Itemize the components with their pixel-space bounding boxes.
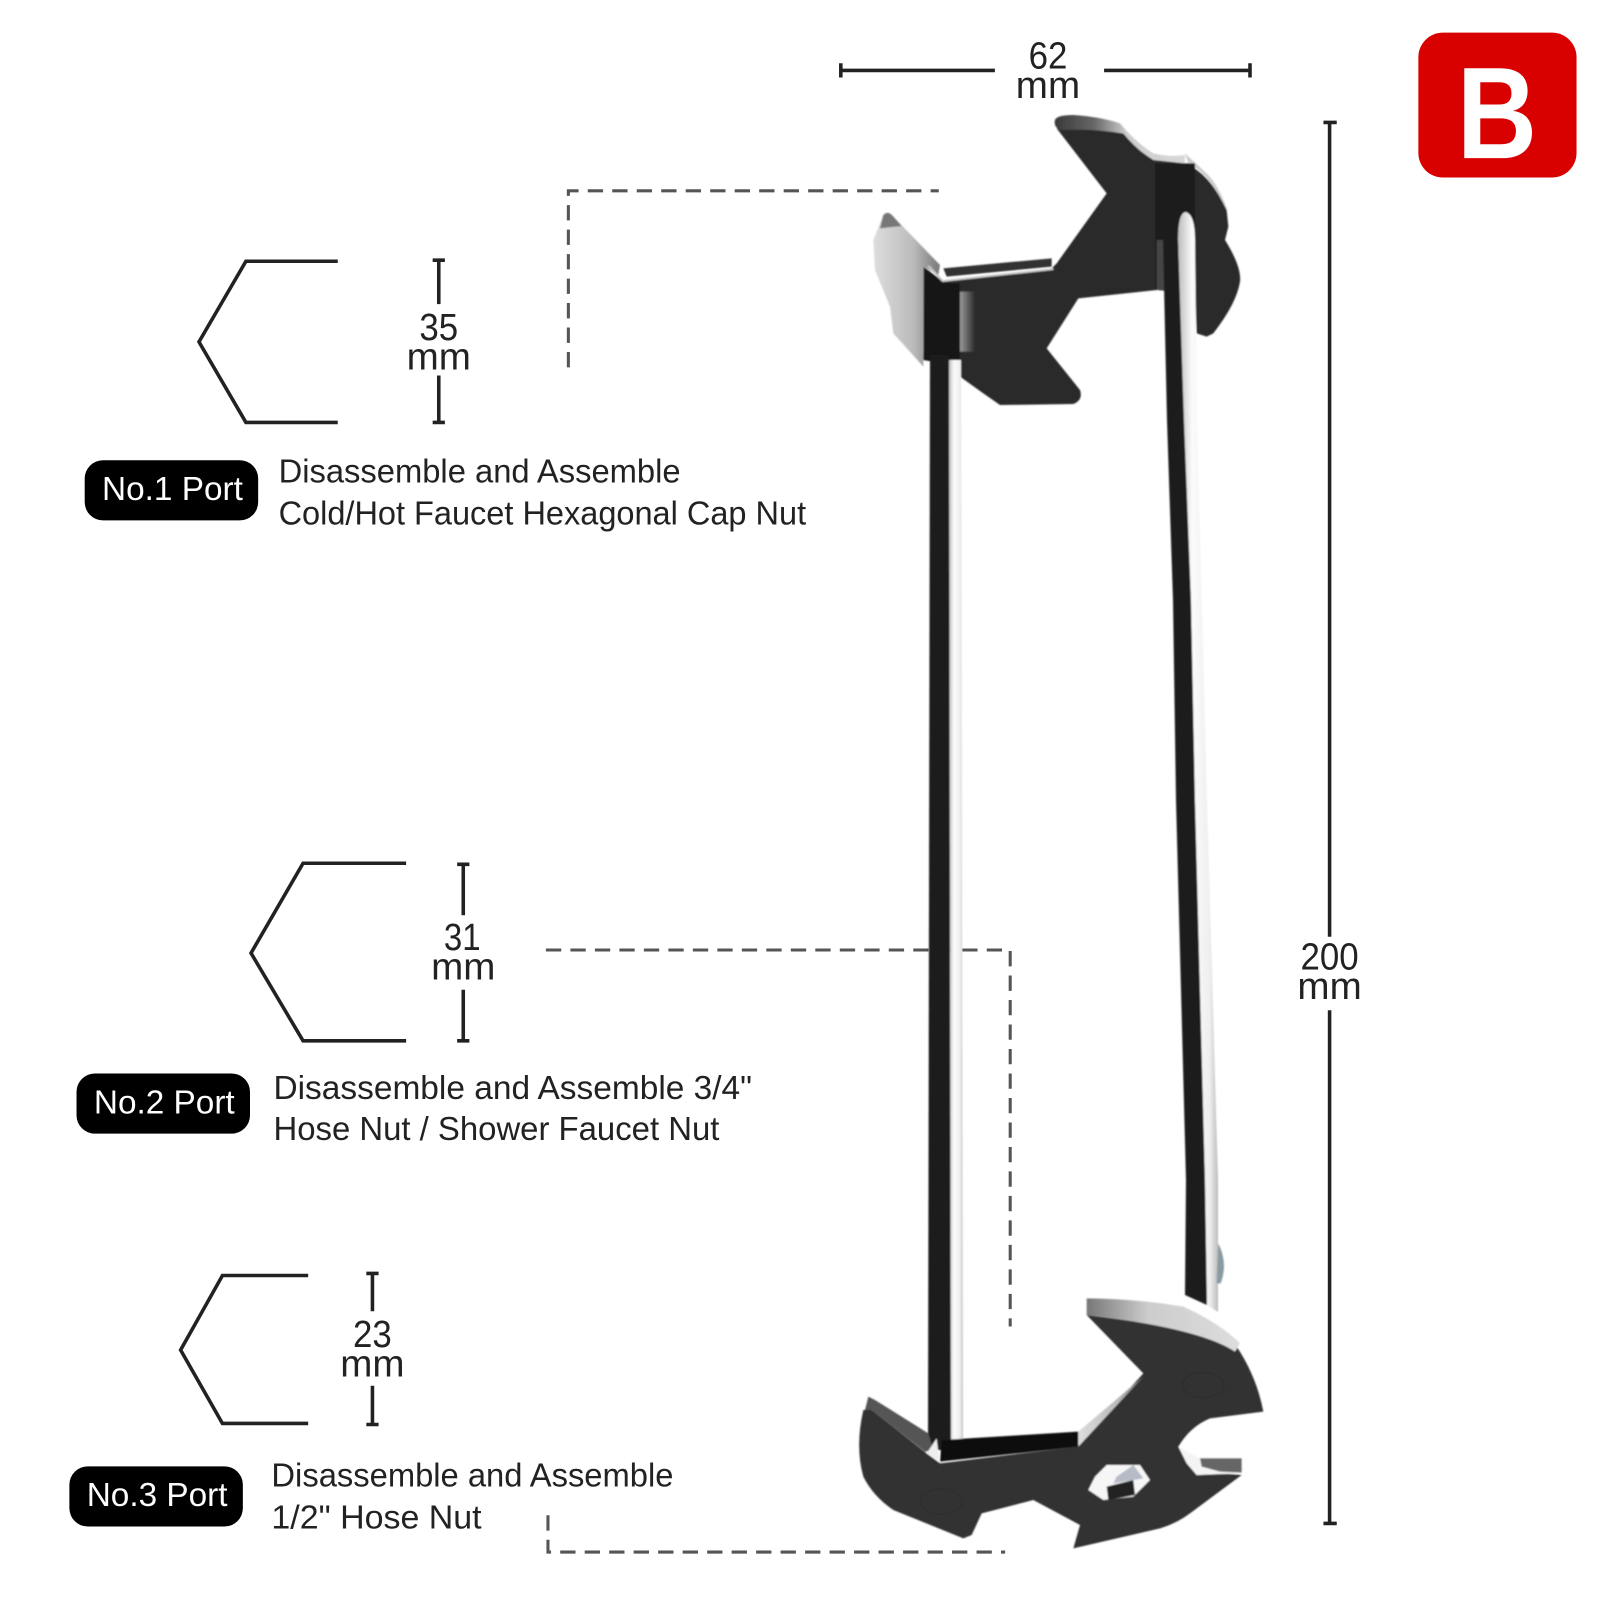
badge: B: B: [1457, 40, 1537, 186]
panel: No.1 port: [85, 260, 807, 532]
description: No.1 port: Cold/Hot Faucet Hexagonal Cap Nut: [279, 495, 807, 532]
description: No.3 port: 1/2" Hose Nut: [271, 1500, 482, 1537]
badge: B: [1418, 33, 1577, 186]
dashed leader: No.3 port: [548, 1515, 1005, 1552]
description: No.1 port: Disassemble and Assemble: [279, 454, 681, 491]
dimension: 23 mm: mm: [340, 1343, 405, 1385]
wrench: bottom head: [859, 1243, 1263, 1548]
dashed leader: No.2 port: [546, 950, 1010, 1327]
dimension: 35 mm: [407, 260, 471, 422]
height dimension: 200 mm: [1297, 122, 1362, 1523]
dimension: 31 mm: 31: [444, 916, 481, 958]
dimension: 35 mm: mm: [407, 335, 471, 377]
label pill: No.1 Port: [85, 460, 258, 520]
description: No.2 port: Disassemble and Assemble 3/4": [273, 1070, 752, 1107]
description: No.3 port: [271, 1458, 673, 1537]
dimension: 35 mm: 35: [419, 306, 458, 348]
dimension: 23 mm: 23: [353, 1313, 392, 1355]
wrench illustration: [859, 115, 1263, 1548]
width dimension: 62 mm: mm: [1016, 64, 1080, 106]
wrench: top head: [873, 115, 1240, 405]
panel: No.3 port: [69, 1273, 673, 1537]
height dimension: 200 mm: 200: [1301, 935, 1359, 977]
label pill: No.1 Port: No.1 Port: [102, 471, 243, 508]
label pill: No.2 Port: No.2 Port: [94, 1084, 235, 1121]
icon: 35 mm hex profile: [199, 261, 338, 422]
description: No.1 port: [279, 454, 807, 532]
wrench: right rod: [1163, 212, 1218, 1312]
description: No.2 port: Hose Nut / Shower Faucet Nut: [273, 1111, 720, 1148]
label pill: No.3 Port: No.3 Port: [87, 1477, 228, 1514]
dimension: 31 mm: [431, 864, 495, 1041]
icon: 31 mm hex profile: [251, 863, 406, 1041]
width dimension: 62 mm: 62: [1029, 34, 1067, 76]
dimension: 23 mm: [340, 1273, 405, 1424]
dimension: 31 mm: mm: [431, 946, 495, 988]
icon: 23 mm hex profile: [181, 1276, 308, 1423]
description: No.2 port: [273, 1070, 752, 1148]
dashed leader: No.1 port: [568, 191, 939, 367]
label pill: No.2 Port: [77, 1073, 250, 1134]
description: No.3 port: Disassemble and Assemble: [271, 1458, 673, 1495]
wrench: left rod: [928, 355, 963, 1450]
height dimension: 200 mm: mm: [1297, 965, 1362, 1007]
label pill: No.3 Port: [69, 1466, 243, 1527]
panel: No.2 port: [77, 863, 752, 1148]
width dimension: 62 mm: [841, 34, 1250, 106]
